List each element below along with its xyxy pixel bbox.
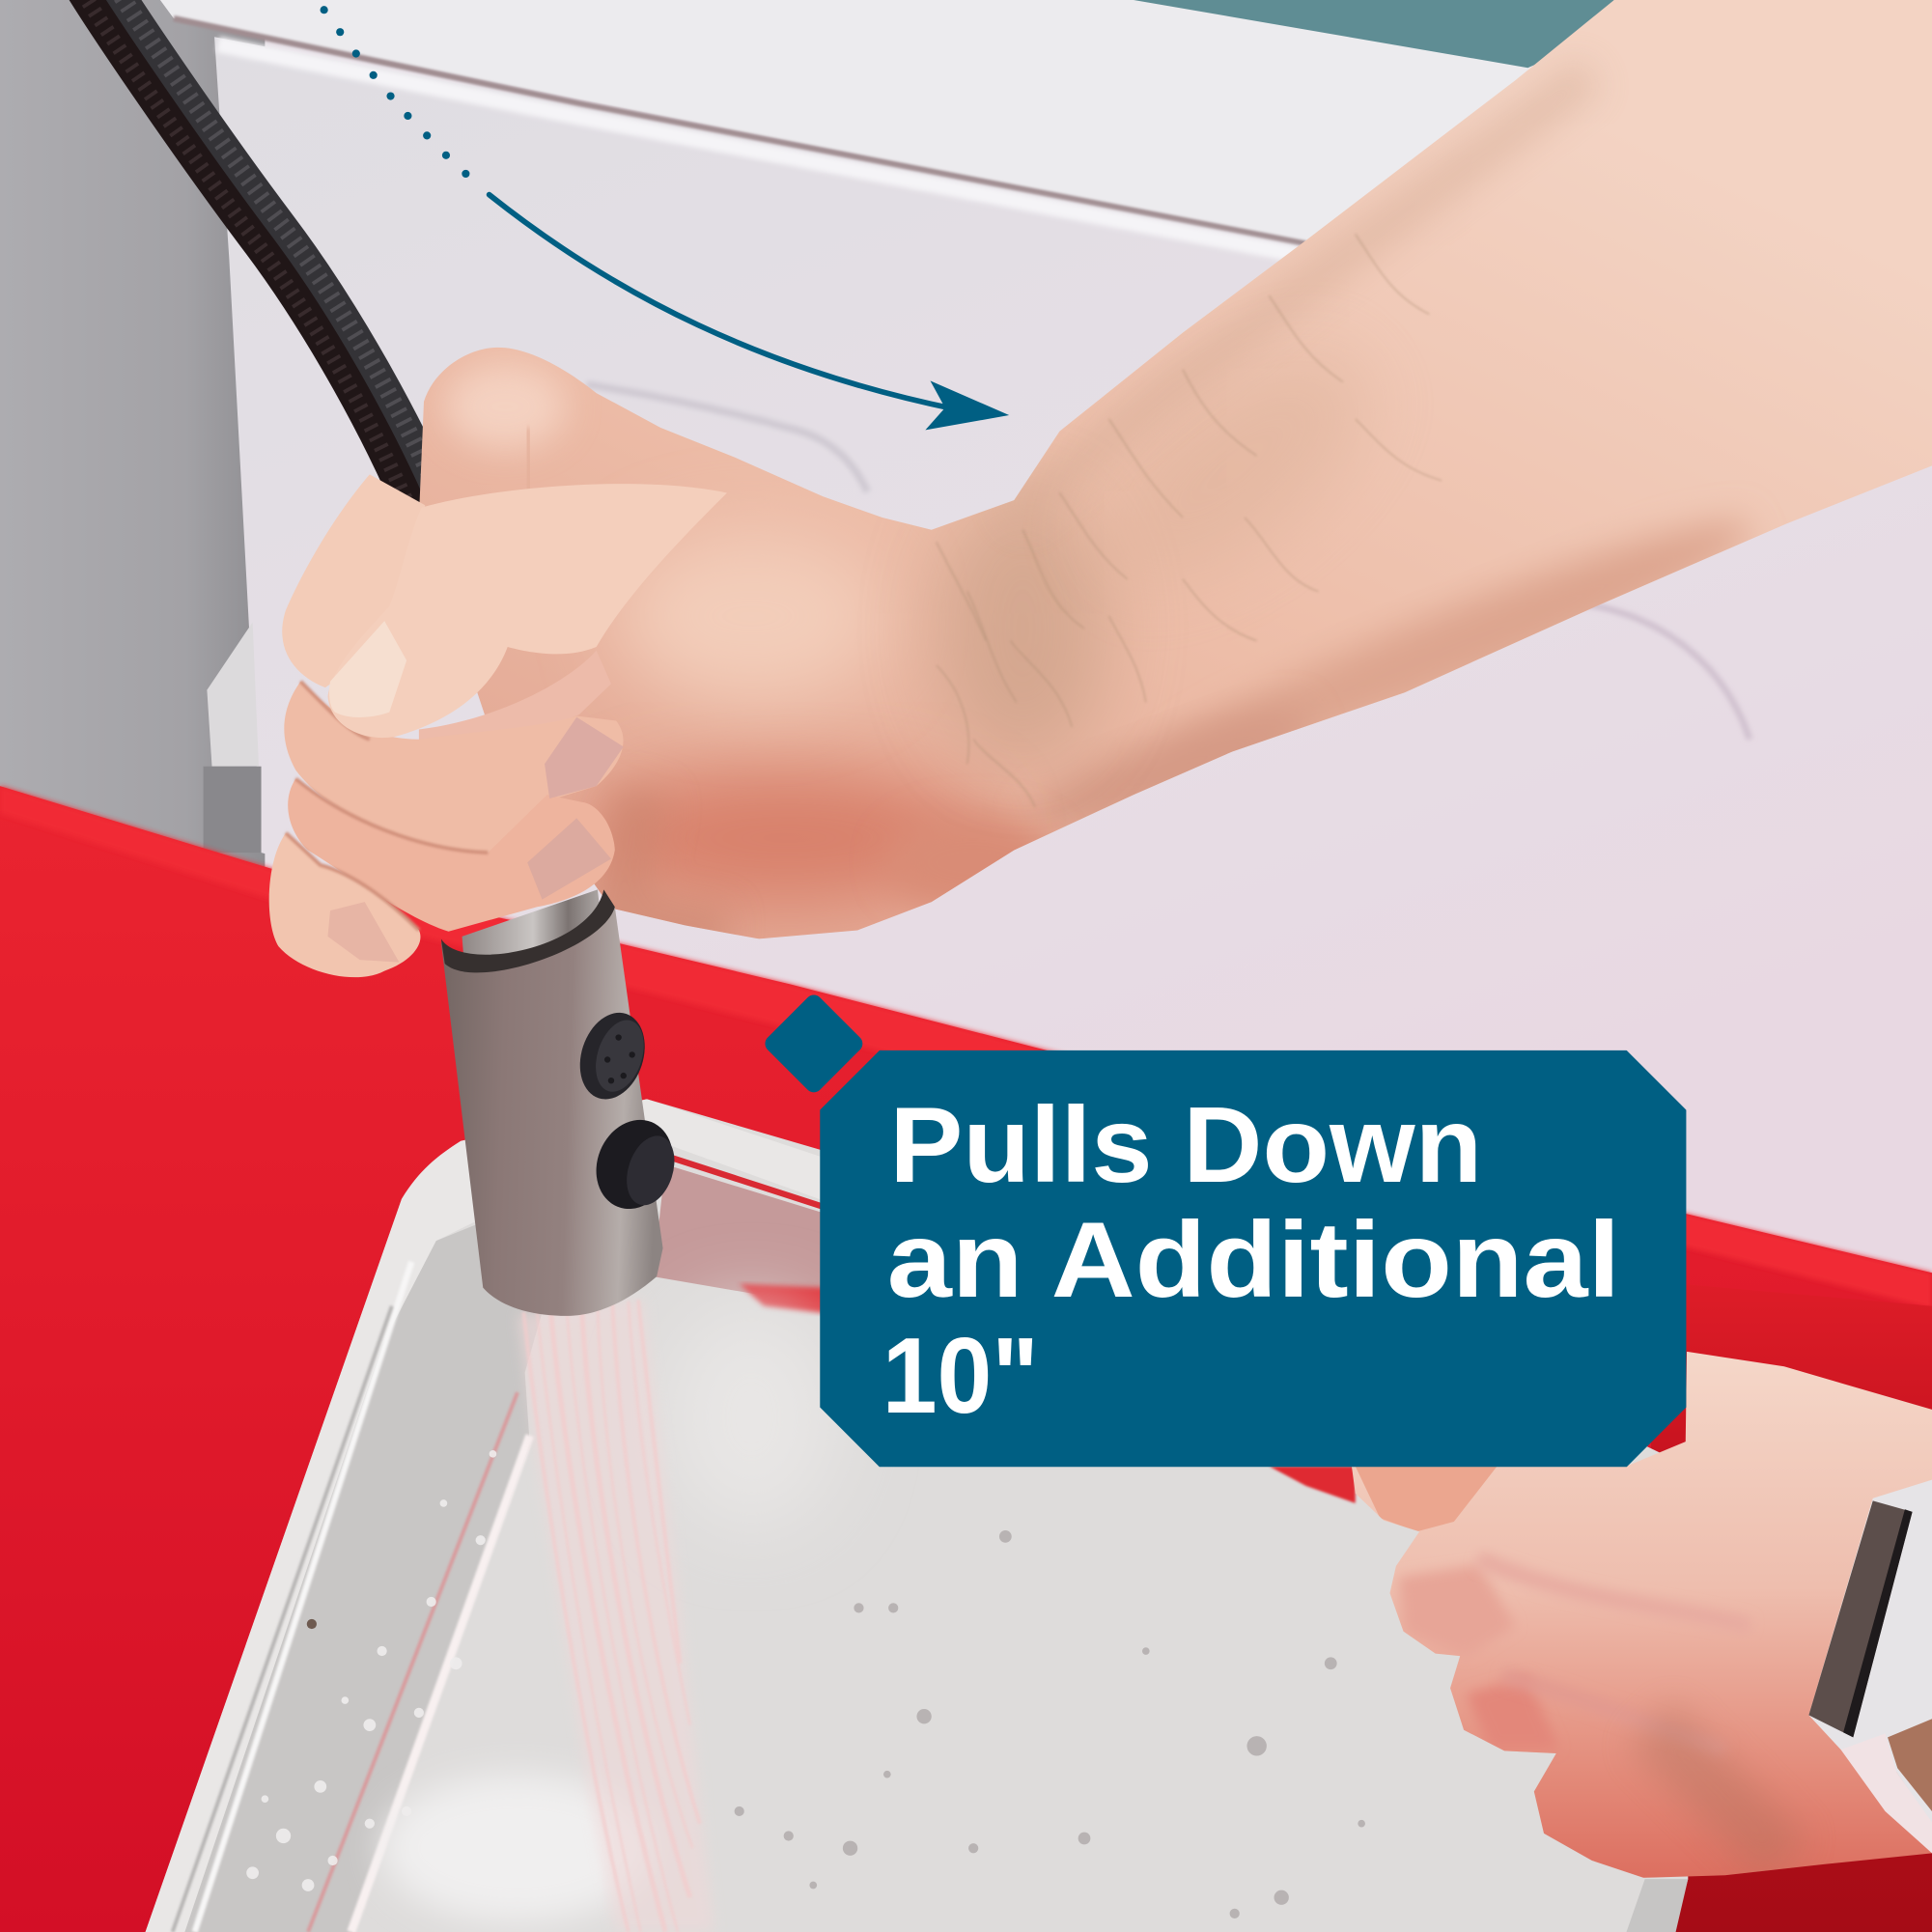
smartwatch [1808, 1480, 1932, 1853]
middle finger [284, 682, 624, 853]
water droplets [735, 1530, 1365, 1918]
thumb nail [329, 621, 406, 717]
thumb [327, 484, 727, 738]
wrist hair [937, 234, 1442, 807]
photo: red tub [0, 786, 1932, 1932]
under-thumb finger strip [419, 651, 611, 746]
curved arrow [490, 195, 1009, 430]
photo: forearm and back of hand [406, 0, 1932, 961]
droplets on side band [246, 1450, 496, 1891]
photo: fingers gripping the spray head [269, 474, 727, 977]
pinky nail [327, 902, 399, 963]
photo: second hand on the basin [1343, 1343, 1932, 1886]
callout text: an Additional [887, 1199, 1620, 1320]
ring finger [288, 779, 615, 932]
index finger [282, 474, 425, 687]
photo: steel basin with water [146, 1099, 1688, 1932]
ring finger nail [527, 818, 611, 900]
callout panel [821, 1051, 1686, 1467]
callout text: 10" [882, 1315, 1039, 1436]
dotted arrow trail [321, 6, 469, 178]
spray head buttons [570, 1004, 686, 1220]
finger creases [286, 682, 488, 930]
callout text: Pulls Down [889, 1084, 1482, 1205]
middle finger nail [545, 717, 624, 798]
photo: water spray [518, 1299, 714, 1932]
pinky finger [269, 833, 420, 977]
callout diamond marker [762, 992, 866, 1096]
photo: spray head [441, 889, 686, 1316]
photo: black braided hose [76, 0, 446, 531]
